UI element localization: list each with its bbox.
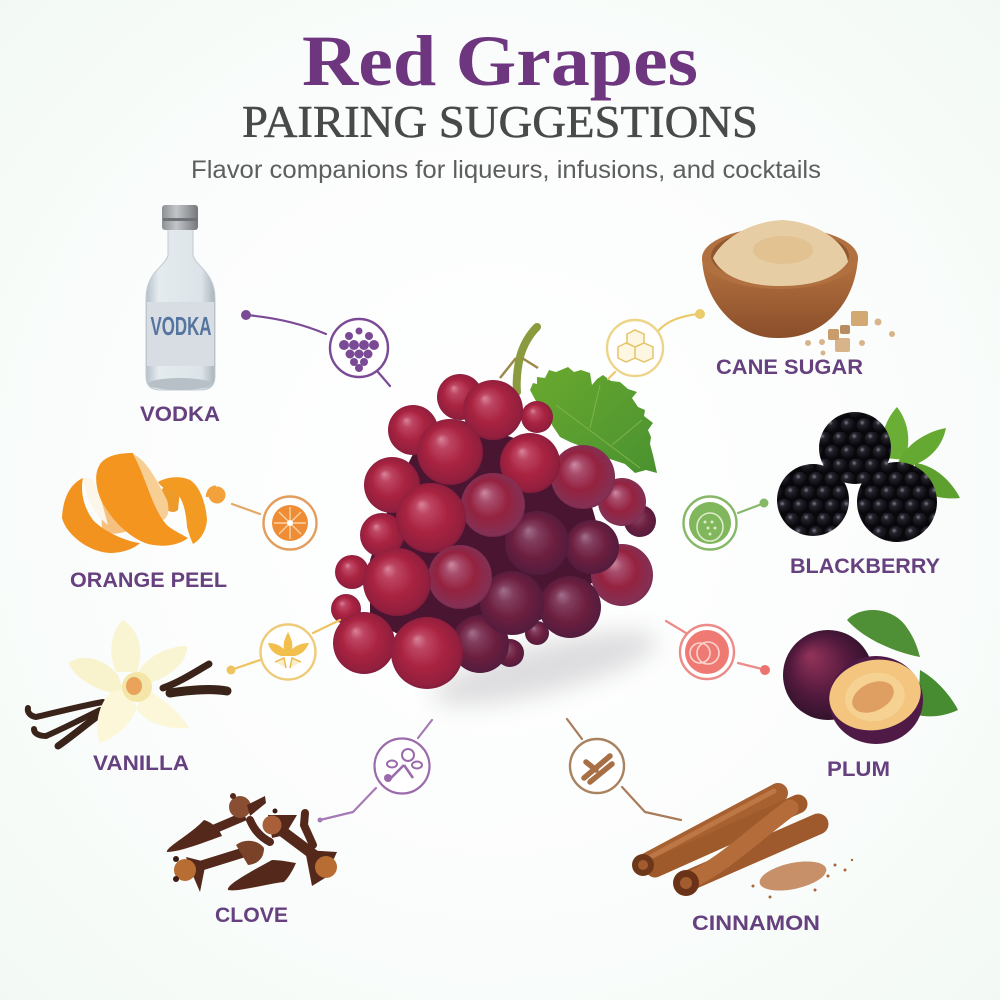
label: plum: PLUM [827, 758, 890, 781]
connector and icon: vodka grapes [241, 310, 390, 386]
label: orange peel: ORANGE PEEL [70, 569, 227, 592]
vodka bottle [146, 205, 215, 390]
label: vanilla: VANILLA [93, 752, 189, 775]
cinnamon sticks [632, 791, 853, 898]
title: Red Grapes [302, 21, 698, 101]
orange peel [62, 453, 226, 553]
tagline: Flavor companions for liqueurs, infusions, and cocktails [191, 156, 821, 184]
connector and icon: cinnamon [567, 719, 681, 820]
connector and icon: citrus [232, 496, 316, 550]
blackberries [777, 407, 960, 542]
vanilla flower and pods [28, 620, 227, 746]
connector and icon: plum [666, 621, 770, 679]
label: clove: CLOVE [215, 904, 288, 927]
label: cinnamon: CINNAMON [692, 912, 820, 935]
connector and icon: sugar cubes [607, 309, 705, 379]
vodka bottle: VODKA [150, 311, 212, 341]
subtitle heading: PAIRING SUGGESTIONS [242, 97, 758, 147]
connector and icon: clove [318, 720, 432, 822]
connector and icon: flower [226, 620, 340, 680]
label: cane sugar: CANE SUGAR [716, 356, 863, 379]
label: blackberry: BLACKBERRY [790, 555, 940, 578]
cloves [167, 793, 337, 892]
plum [783, 610, 958, 744]
grape leaf [530, 367, 657, 473]
label: vodka: VODKA [140, 403, 220, 426]
sugar bowl [702, 220, 895, 356]
connector and icon: blackberry [684, 496, 768, 550]
central grape bunch illustration [331, 327, 662, 719]
